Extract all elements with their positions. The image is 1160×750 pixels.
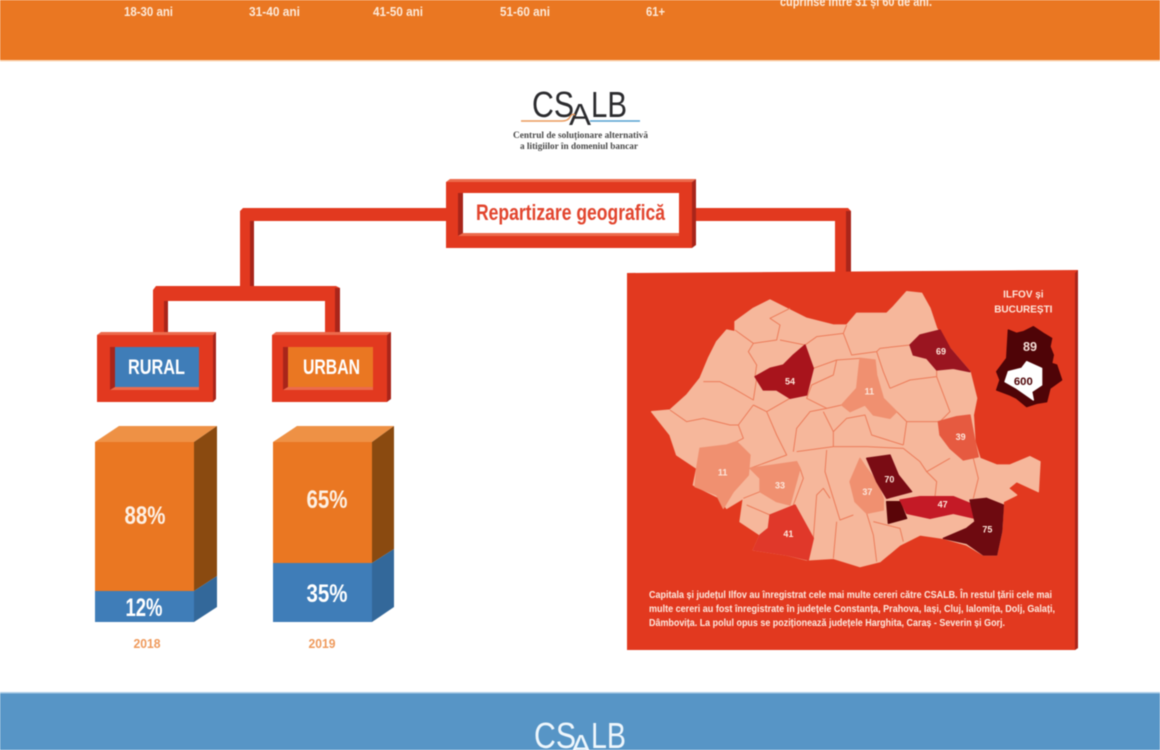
age group labels: 18-30 ani — [124, 5, 173, 19]
heading: Repartizare geografică — [446, 179, 696, 248]
3D bar: rural 2018: 88% — [124, 502, 166, 530]
logo subtitle — [513, 131, 648, 152]
map: counties: 75 — [982, 524, 992, 534]
label box: RURAL — [97, 332, 216, 402]
map: counties: 37 — [862, 487, 872, 497]
age group labels: 51-60 ani — [500, 5, 550, 19]
map description text: Dâmbovița. La polul opus se poziționează județele Harghita, Caraș - Severin și Gorj. — [649, 617, 1005, 629]
age group labels: 61+ — [646, 5, 665, 19]
map description text: Capitala și județul Ilfov au înregistrat cele mai multe cereri către CSALB. În restul țării cele mai — [649, 588, 1052, 601]
map: counties: 11 — [718, 468, 727, 478]
bottom blue band with logo — [0, 692, 1160, 750]
inset: Ilfov and București — [994, 290, 1062, 407]
logo subtitle: a litigiilor în domeniul bancar — [520, 142, 639, 152]
map: counties: 41 — [783, 529, 793, 539]
inset: Ilfov and București: BUCUREȘTI — [994, 304, 1053, 315]
map: counties: 11 — [865, 386, 874, 396]
3D bar: urban 2019: 35% — [306, 580, 348, 608]
3D bar: urban 2019: 65% — [306, 486, 348, 514]
3D bar: rural 2018 — [95, 426, 217, 651]
label box: RURAL: RURAL — [128, 356, 185, 379]
logo subtitle: Centrul de soluționare alternativă — [513, 131, 648, 141]
map: counties: 33 — [775, 480, 785, 490]
age group labels: 31-40 ani — [249, 5, 300, 19]
3D bar: urban 2019: 2019 — [308, 636, 336, 651]
label box: URBAN — [272, 332, 391, 402]
panel: map of Romania — [627, 270, 1078, 650]
age group labels: 41-50 ani — [373, 5, 423, 19]
map: counties: 70 — [884, 475, 894, 485]
map description text: multe cereri au fost înregistrate în județele Constanța, Prahova, Iași, Cluj, Ialomița, Dolj, Galați, — [649, 603, 1055, 615]
CSALB logo — [513, 84, 648, 152]
CSALB logo: A — [569, 97, 591, 132]
CSALB logo: CS — [532, 84, 574, 125]
heading: Repartizare geografică: Repartizare geografică — [476, 200, 666, 225]
label box: URBAN: URBAN — [303, 356, 360, 379]
map: counties: 47 — [938, 499, 948, 509]
top orange band — [0, 0, 1160, 62]
3D bar: urban 2019 — [273, 426, 394, 651]
map description text — [649, 588, 1055, 629]
inset: Ilfov and București: 89 — [1023, 340, 1037, 354]
map: counties: 54 — [785, 376, 795, 386]
inset: Ilfov and București: 600 — [1014, 376, 1033, 388]
connector lines — [153, 208, 851, 332]
map: counties — [652, 292, 1040, 567]
CSALB logo: LB — [591, 84, 627, 125]
map: counties: 39 — [956, 432, 966, 442]
age group labels — [124, 0, 932, 19]
3D bar: rural 2018: 12% — [126, 594, 162, 622]
inset: Ilfov and București: ILFOV și — [1003, 290, 1044, 301]
3D bar: rural 2018: 2018 — [134, 636, 160, 651]
map: counties: 69 — [936, 346, 946, 356]
